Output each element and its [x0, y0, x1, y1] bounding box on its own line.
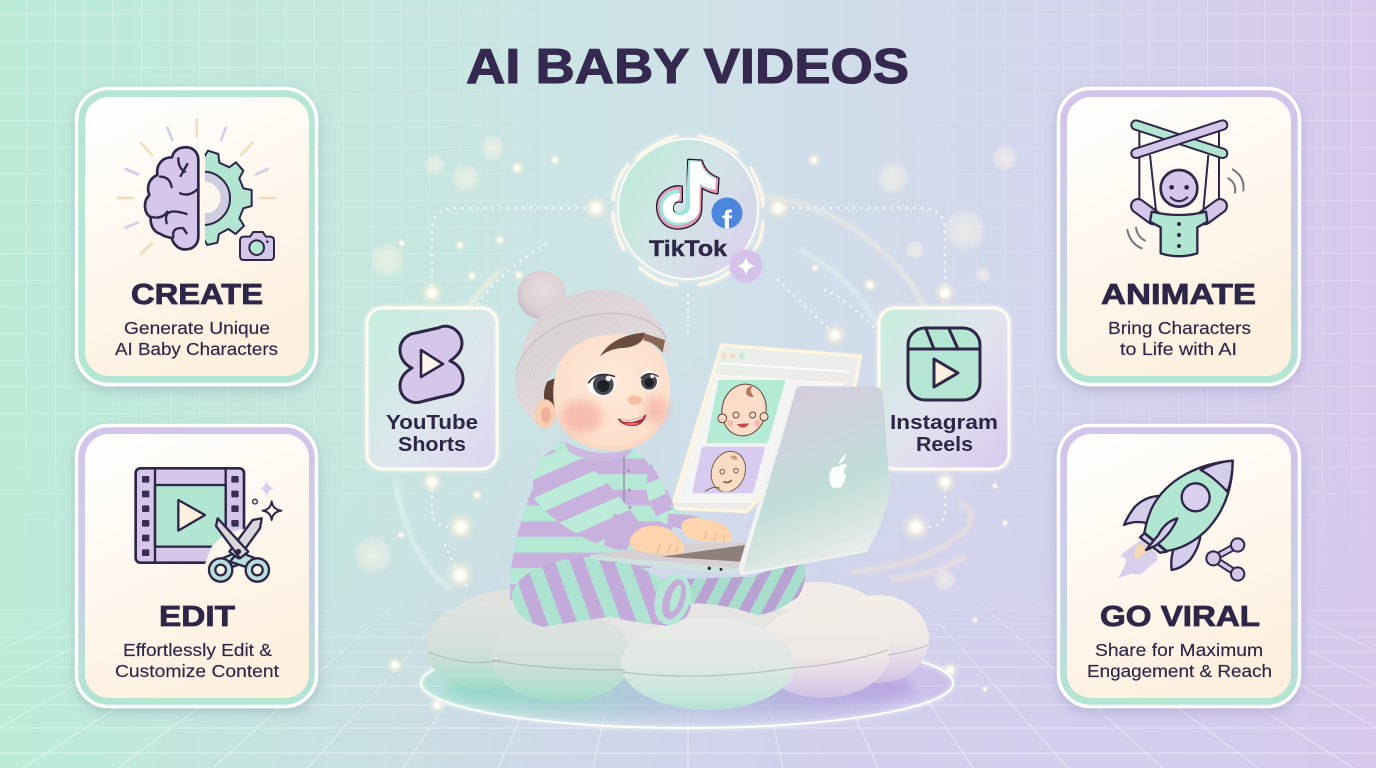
- laptop lid: [739, 386, 890, 575]
- tiktok label: TikTok: [649, 236, 728, 261]
- icon: brain and gear: [118, 119, 276, 260]
- camera: [240, 232, 274, 260]
- youtube label: [386, 411, 478, 456]
- panel: instagram reels: [879, 308, 1009, 469]
- animate heading: ANIMATE: [1101, 279, 1256, 311]
- apple logo: [829, 453, 847, 488]
- dashed glow ring: [613, 136, 763, 285]
- glowing browser window: [672, 345, 861, 512]
- icon: film and scissors: [136, 468, 281, 582]
- edit description: Effortlessly Edit &: [123, 640, 272, 660]
- knit hat: [515, 271, 671, 427]
- youtube label: Shorts: [398, 433, 466, 456]
- eyes: [588, 370, 658, 396]
- thumbnail: mint baby face: [708, 380, 783, 442]
- thumbnail: lavender baby face: [694, 447, 763, 497]
- icon: shorts: [400, 326, 463, 403]
- near arm and hand: [533, 450, 684, 555]
- torso: [510, 442, 677, 603]
- panel: youtube shorts: [367, 308, 497, 469]
- animate description: [1108, 318, 1251, 359]
- go viral description: [1087, 640, 1272, 681]
- create description: [115, 318, 278, 359]
- icon: facebook badge: [712, 198, 742, 228]
- title: AI BABY VIDEOS: [466, 40, 909, 94]
- youtube label: YouTube: [386, 411, 478, 434]
- instagram label: [890, 411, 998, 456]
- edit description: [115, 640, 279, 681]
- panel: animate: [1058, 88, 1300, 384]
- go viral description: Share for Maximum: [1095, 640, 1263, 660]
- icon: tiktok note: [657, 160, 718, 228]
- panel: edit: [76, 426, 316, 706]
- cloud cushion: [425, 582, 929, 710]
- icon: reels: [908, 328, 980, 400]
- create description: Generate Unique: [124, 318, 270, 338]
- baby illustration: [510, 271, 890, 629]
- create description: AI Baby Characters: [115, 339, 278, 359]
- icon: facebook badge: f: [722, 205, 733, 238]
- instagram label: Reels: [916, 433, 973, 456]
- animate description: Bring Characters: [1108, 318, 1251, 338]
- icon: rocket: [1118, 461, 1244, 581]
- icon: sparkle badge: [730, 250, 762, 282]
- light rays: [118, 119, 276, 254]
- animate description: to Life with AI: [1120, 339, 1237, 359]
- go viral description: Engagement & Reach: [1087, 661, 1272, 681]
- share icon: [1206, 538, 1244, 581]
- connector network and sparkles: [353, 135, 1019, 714]
- go viral heading: GO VIRAL: [1100, 601, 1260, 633]
- panel: tiktok: [613, 136, 763, 285]
- sparkles: [253, 480, 281, 520]
- near leg: [512, 557, 697, 629]
- far arm: [647, 460, 733, 543]
- panel: create: [76, 88, 316, 384]
- head: [534, 333, 670, 451]
- icon: puppet: [1127, 125, 1244, 256]
- glowing floor ring: [421, 638, 953, 728]
- far leg: [647, 564, 805, 615]
- instagram label: Instagram: [890, 411, 998, 434]
- create heading: CREATE: [131, 279, 263, 311]
- scissors: [209, 518, 269, 582]
- edit description: Customize Content: [115, 661, 279, 681]
- laptop base: [590, 542, 747, 575]
- edit heading: EDIT: [159, 601, 235, 633]
- panel: go viral: [1058, 426, 1300, 706]
